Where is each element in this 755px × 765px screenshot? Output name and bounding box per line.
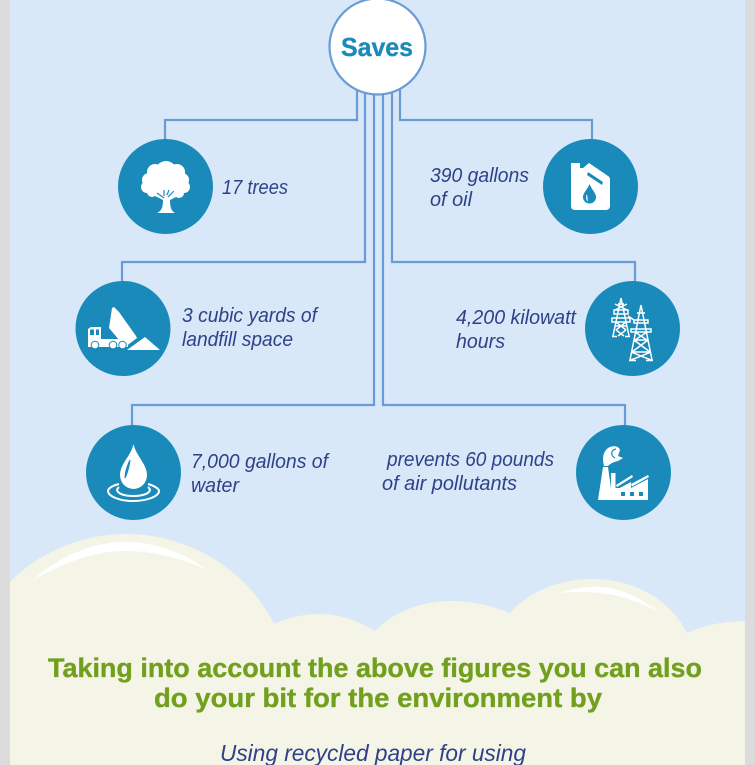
heading: Taking into account the above figures you can also bbox=[48, 653, 702, 683]
label: 4,200 kilowatt hours bbox=[456, 306, 577, 353]
label: prevents 60 pounds of air pollutants bbox=[382, 448, 554, 495]
label: prevents 60 pounds of air pollutants: prevents 60 pounds bbox=[386, 448, 554, 471]
label: 4,200 kilowatt hours: hours bbox=[456, 330, 505, 353]
label: 390 gallons of oil: of oil bbox=[430, 188, 473, 211]
icon: factory bbox=[576, 425, 671, 520]
label: 7,000 gallons of water: water bbox=[191, 474, 240, 497]
label: 7,000 gallons of water bbox=[191, 450, 330, 497]
icon: power pylons bbox=[585, 281, 680, 376]
label: 7,000 gallons of water: 7,000 gallons of bbox=[191, 450, 330, 473]
label: 3 cubic yards of landfill space bbox=[182, 304, 319, 351]
icon: oil can bbox=[543, 139, 638, 234]
label: 4,200 kilowatt hours: 4,200 kilowatt bbox=[456, 306, 577, 329]
label: prevents 60 pounds of air pollutants: of air pollutants bbox=[382, 472, 517, 495]
label: 390 gallons of oil bbox=[430, 164, 529, 211]
icon: tree bbox=[118, 139, 213, 234]
label: 17 trees: 17 trees bbox=[222, 176, 288, 199]
label: 3 cubic yards of landfill space: landfill space bbox=[182, 328, 293, 351]
icon: water drop bbox=[86, 425, 181, 520]
central node: Saves bbox=[330, 0, 426, 94]
cloud panel bbox=[10, 534, 745, 765]
connector lines bbox=[122, 90, 635, 428]
label: 390 gallons of oil: 390 gallons bbox=[430, 164, 529, 187]
icon: dump truck bbox=[76, 281, 170, 376]
heading bbox=[48, 653, 702, 713]
label: 3 cubic yards of landfill space: 3 cubic yards of bbox=[182, 304, 319, 327]
central node: Saves: Saves bbox=[341, 32, 413, 62]
heading: do your bit for the environment by bbox=[154, 683, 602, 713]
